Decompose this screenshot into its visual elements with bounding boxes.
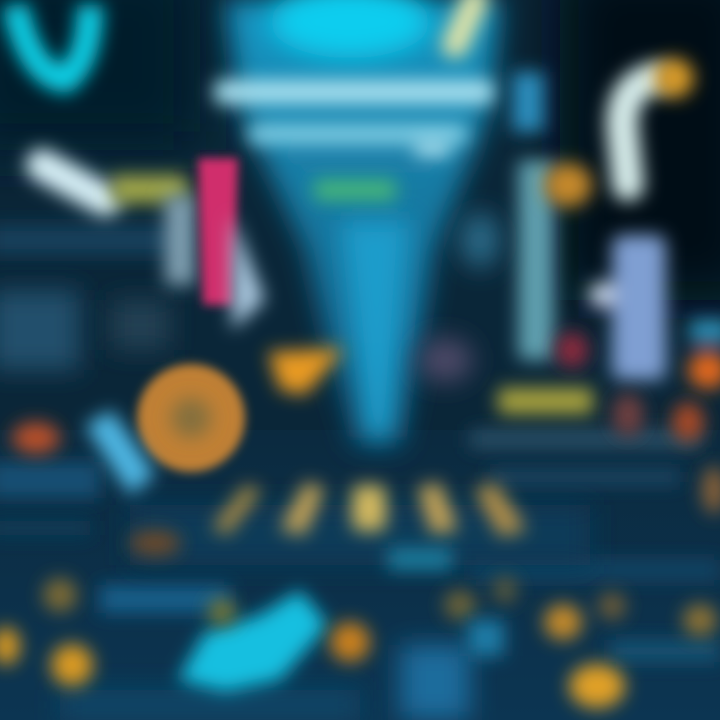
right panel: teal column xyxy=(518,160,554,360)
right panel: dim marker xyxy=(460,212,500,268)
left panel: yellow label xyxy=(112,175,187,203)
small teal bar lower centre xyxy=(388,548,452,570)
right panel: orange dot xyxy=(544,163,592,207)
central light funnel xyxy=(225,0,500,450)
bottom orange dots xyxy=(0,530,717,708)
row of five gold icons xyxy=(212,482,527,537)
right edge bronze marker xyxy=(702,466,720,514)
icon: top yellow accent xyxy=(455,0,475,45)
orange chevron xyxy=(268,348,345,395)
right panel: pale blue column xyxy=(589,235,666,380)
dim red cluster xyxy=(417,338,473,382)
left panel: slanted white bar xyxy=(42,165,105,200)
orange ring chart xyxy=(137,364,245,472)
yellow label right xyxy=(498,388,593,414)
right panel: muted red marker xyxy=(612,393,644,437)
red-orange accent left xyxy=(12,422,60,454)
right panel: rust marker xyxy=(672,402,704,442)
small blue block lower right xyxy=(468,620,504,656)
right panel: blue top column xyxy=(512,72,544,132)
bottom cyan card xyxy=(178,590,328,692)
left panel: pale blue shard xyxy=(232,215,265,330)
right panel: red accent xyxy=(556,332,588,368)
right panel: white curved icon xyxy=(622,78,655,185)
icon: top left arc xyxy=(15,5,90,80)
title block xyxy=(214,80,494,156)
subtitle xyxy=(314,180,396,200)
left panel: pink bar xyxy=(198,158,238,305)
right panel: orange marker xyxy=(688,320,720,389)
right panel: orange top dot xyxy=(654,58,694,98)
light blue slanted card xyxy=(85,410,155,495)
left panel: pale column xyxy=(165,195,195,285)
